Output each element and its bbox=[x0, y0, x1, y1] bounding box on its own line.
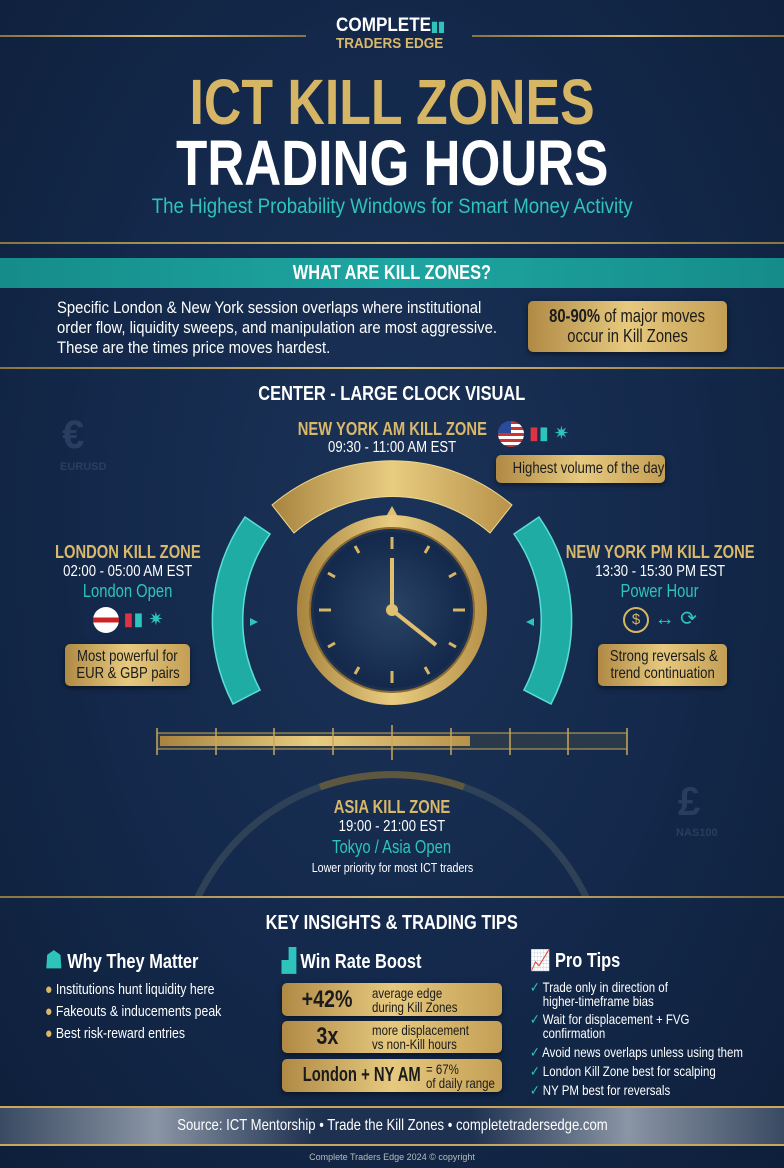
icons NY AM bbox=[498, 421, 569, 447]
clock diagram bbox=[60, 413, 718, 898]
title: TRADING HOURS bbox=[176, 127, 608, 199]
column: win rate boost: more displacement bbox=[372, 1022, 469, 1038]
timeline bar bbox=[157, 725, 627, 760]
clock bbox=[297, 506, 487, 705]
column: pro tips: ✓ Trade only in direction of bbox=[530, 979, 668, 995]
background symbols: EURUSD bbox=[60, 461, 107, 473]
teal arc: London bbox=[212, 517, 270, 704]
NY PM label: 13:30 - 15:30 PM EST bbox=[595, 563, 725, 580]
callout: 80-90% bbox=[528, 301, 727, 352]
column: why they matter: ● Best risk-reward entries bbox=[45, 1025, 185, 1042]
column: win rate boost: = 67% bbox=[426, 1060, 459, 1076]
background symbols: NAS100 bbox=[676, 827, 718, 839]
callout: London: EUR & GBP pairs bbox=[76, 665, 180, 682]
icons NY AM: ▮▮ ✷ bbox=[529, 423, 569, 443]
column: pro tips: ✓ Avoid news overlaps unless using them bbox=[530, 1044, 743, 1060]
copyright: Complete Traders Edge 2024 © copyright bbox=[309, 1152, 475, 1162]
title: ICT KILL ZONES bbox=[189, 66, 595, 138]
background symbols bbox=[60, 413, 718, 839]
NY PM label: NEW YORK PM KILL ZONE bbox=[566, 542, 754, 562]
heading: key insights: KEY INSIGHTS & TRADING TIPS bbox=[266, 912, 518, 934]
heading: clock visual: CENTER - LARGE CLOCK VISUAL bbox=[259, 383, 525, 405]
London label: LONDON KILL ZONE bbox=[55, 542, 201, 562]
Asia label bbox=[311, 797, 473, 875]
column: why they matter bbox=[45, 947, 222, 1042]
column: win rate boost: vs non-Kill hours bbox=[372, 1036, 457, 1052]
column: win rate boost: of daily range bbox=[426, 1074, 495, 1090]
gold arc: NY AM bbox=[272, 461, 512, 533]
London label: ▮▮ ✷ bbox=[124, 609, 163, 629]
subtitle: The Highest Probability Windows for Smart Money Activity bbox=[152, 195, 632, 218]
title bbox=[176, 66, 608, 199]
NY PM label: Power Hour bbox=[621, 581, 699, 601]
column: why they matter: ● Fakeouts & inducements peak bbox=[45, 1003, 221, 1020]
London label: London Open bbox=[83, 581, 173, 601]
background symbols: € bbox=[62, 413, 84, 457]
column: win rate boost: +42% bbox=[302, 986, 352, 1012]
column: why they matter: ● Institutions hunt liquidity here bbox=[45, 981, 214, 998]
NY PM label bbox=[566, 542, 754, 633]
intro text: Specific London & New York session overlaps where institutional bbox=[57, 299, 481, 317]
column: why they matter: ☗ Why They Matter bbox=[45, 947, 198, 974]
callout: NY PM: Strong reversals & bbox=[610, 648, 718, 665]
NY PM label: $ bbox=[632, 611, 640, 628]
Asia label: Lower priority for most ICT traders bbox=[311, 860, 473, 875]
column: win rate boost: London + NY AM bbox=[303, 1064, 421, 1086]
callout: London: Most powerful for bbox=[77, 648, 178, 665]
asia arc bbox=[198, 775, 586, 897]
column: pro tips: confirmation bbox=[543, 1025, 605, 1041]
column: pro tips: higher-timeframe bias bbox=[543, 993, 654, 1009]
background symbols: £ bbox=[678, 780, 700, 824]
callout: highest volume: Highest volume of the day bbox=[513, 460, 664, 477]
NY AM label: NEW YORK AM KILL ZONE bbox=[297, 419, 487, 439]
column: pro tips: ✓ NY PM best for reversals bbox=[530, 1082, 670, 1098]
Asia label: 19:00 - 21:00 EST bbox=[339, 818, 445, 835]
logo: COMPLETE▮▮ bbox=[336, 15, 444, 36]
column: win rate boost bbox=[280, 947, 504, 1096]
footer source bar bbox=[0, 1106, 784, 1146]
intro text: order flow, liquidity sweeps, and manipulation are most aggressive. bbox=[57, 319, 497, 337]
column: win rate boost: during Kill Zones bbox=[372, 998, 458, 1014]
column: pro tips: ✓ Wait for displacement + FVG bbox=[530, 1011, 689, 1027]
intro text: These are the times price moves hardest. bbox=[57, 339, 330, 357]
NY PM label: ↔ ⟳ bbox=[655, 608, 697, 630]
callout: NY PM bbox=[598, 644, 727, 686]
banner: what are kill zones bbox=[0, 258, 784, 288]
Asia label: ASIA KILL ZONE bbox=[334, 797, 450, 817]
column: pro tips: 📈 Pro Tips bbox=[530, 950, 620, 972]
teal arc: NY PM bbox=[514, 517, 572, 704]
NY AM label bbox=[297, 419, 487, 456]
column: win rate boost: 3x bbox=[316, 1023, 338, 1050]
callout: highest volume bbox=[496, 455, 665, 483]
Asia label: Tokyo / Asia Open bbox=[333, 837, 451, 857]
column: pro tips: ✓ London Kill Zone best for scalping bbox=[530, 1063, 716, 1079]
intro text bbox=[57, 299, 497, 357]
logo bbox=[336, 15, 444, 52]
callout: London bbox=[65, 644, 190, 686]
logo: TRADERS EDGE bbox=[336, 35, 444, 52]
footer source bar: Source: ICT Mentorship • Trade the Kill Zones • completetradersedge.com bbox=[177, 1117, 607, 1134]
column: pro tips bbox=[530, 949, 743, 1098]
London label bbox=[55, 542, 201, 633]
banner: what are kill zones: WHAT ARE KILL ZONES? bbox=[293, 262, 491, 284]
London label: 02:00 - 05:00 AM EST bbox=[63, 563, 193, 580]
callout: NY PM: trend continuation bbox=[610, 665, 715, 682]
callout: 80-90%: occur in Kill Zones bbox=[567, 326, 688, 346]
column: win rate boost: ▟ Win Rate Boost bbox=[282, 948, 421, 973]
column: win rate boost: average edge bbox=[372, 984, 442, 1000]
callout: 80-90%: 80-90% of major moves bbox=[550, 306, 705, 326]
NY AM label: 09:30 - 11:00 AM EST bbox=[328, 439, 456, 456]
